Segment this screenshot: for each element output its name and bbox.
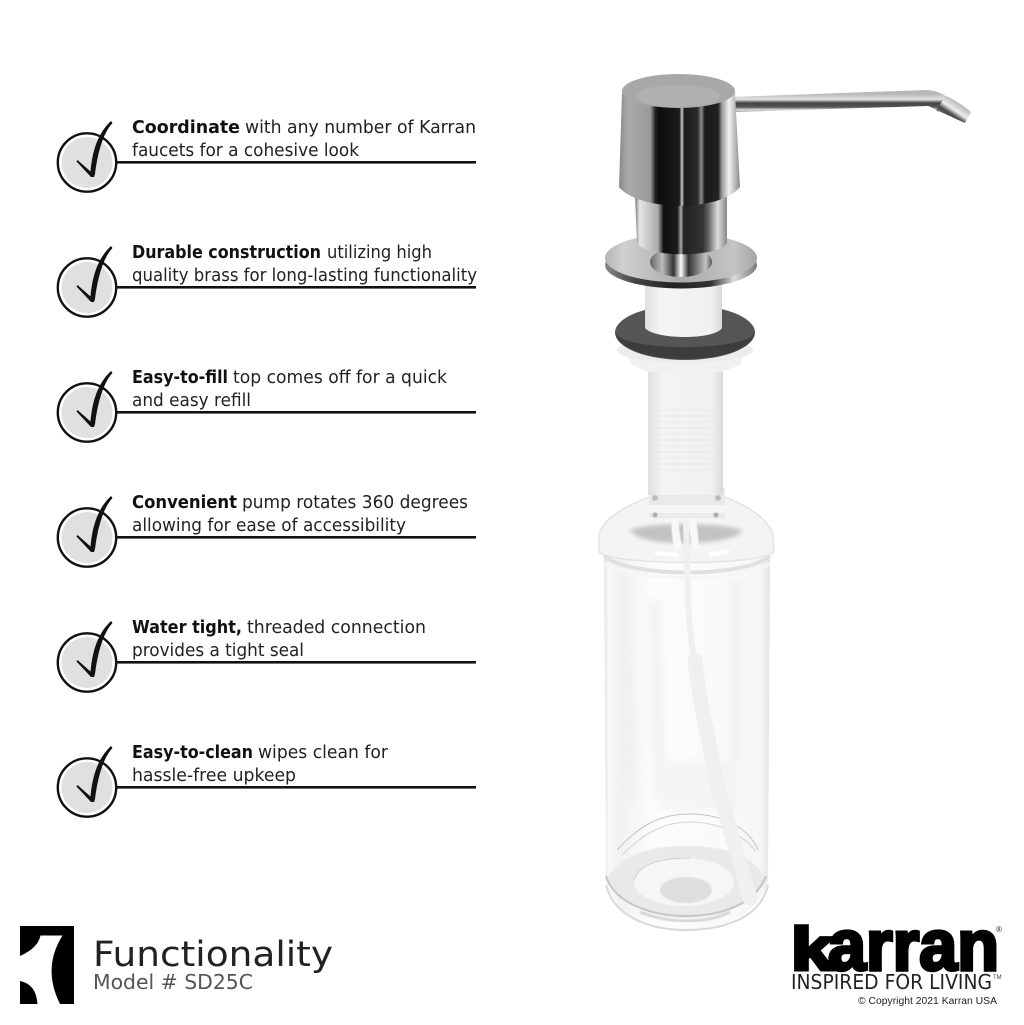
feature: durable construction: quality brass for long-lasting functionality (132, 265, 477, 286)
model number: Model # SD25C (93, 970, 253, 994)
feature: convenient (58, 492, 476, 567)
karran logo: ® (996, 925, 1002, 934)
feature: coordinate: with any number of Karran (245, 117, 476, 138)
feature: coordinate: Coordinate (132, 117, 240, 138)
tagline: TM (993, 975, 1002, 981)
feature: water tight: provides a tight seal (132, 640, 304, 661)
feature: convenient: Convenient (132, 492, 237, 513)
feature: coordinate (58, 117, 476, 192)
threaded stem (625, 352, 745, 495)
feature: durable construction: Durable construction (132, 242, 321, 263)
feature: water tight (58, 617, 476, 692)
feature: easy-to-fill: top comes off for a quick (233, 367, 448, 388)
pump head (619, 74, 740, 206)
feature: convenient: pump rotates 360 degrees (242, 492, 468, 513)
feature: durable construction (58, 242, 477, 317)
karran logo: arran (828, 907, 999, 986)
white collar tube (645, 285, 722, 337)
copyright: © Copyright 2021 Karran USA (858, 996, 997, 1007)
feature: easy-to-fill: Easy-to-fill (132, 367, 228, 388)
feature: water tight: threaded connection (247, 617, 426, 638)
title: Functionality (93, 935, 333, 975)
base flange (605, 234, 757, 288)
rubber gasket (615, 305, 755, 363)
tagline: INSPIRED FOR LIVING (791, 970, 992, 994)
feature: convenient: allowing for ease of accessibility (132, 515, 406, 536)
pump neck (635, 195, 727, 254)
spout (730, 90, 971, 123)
feature: easy-to-clean: wipes clean for (258, 742, 389, 763)
feature: easy-to-fill (58, 367, 476, 442)
feature: water tight: Water tight, (132, 617, 242, 638)
feature: easy-to-fill: and easy refill (132, 390, 251, 411)
feature: coordinate: faucets for a cohesive look (132, 140, 360, 161)
feature: easy-to-clean: hassle-free upkeep (132, 765, 296, 786)
feature: durable construction: utilizing high (327, 242, 432, 263)
product: soap dispenser (599, 74, 971, 930)
karran logo: k (791, 916, 834, 983)
brand mark (20, 926, 74, 1004)
feature: easy-to-clean (58, 742, 476, 817)
feature: easy-to-clean: Easy-to-clean (132, 742, 253, 763)
bottle (599, 488, 774, 930)
